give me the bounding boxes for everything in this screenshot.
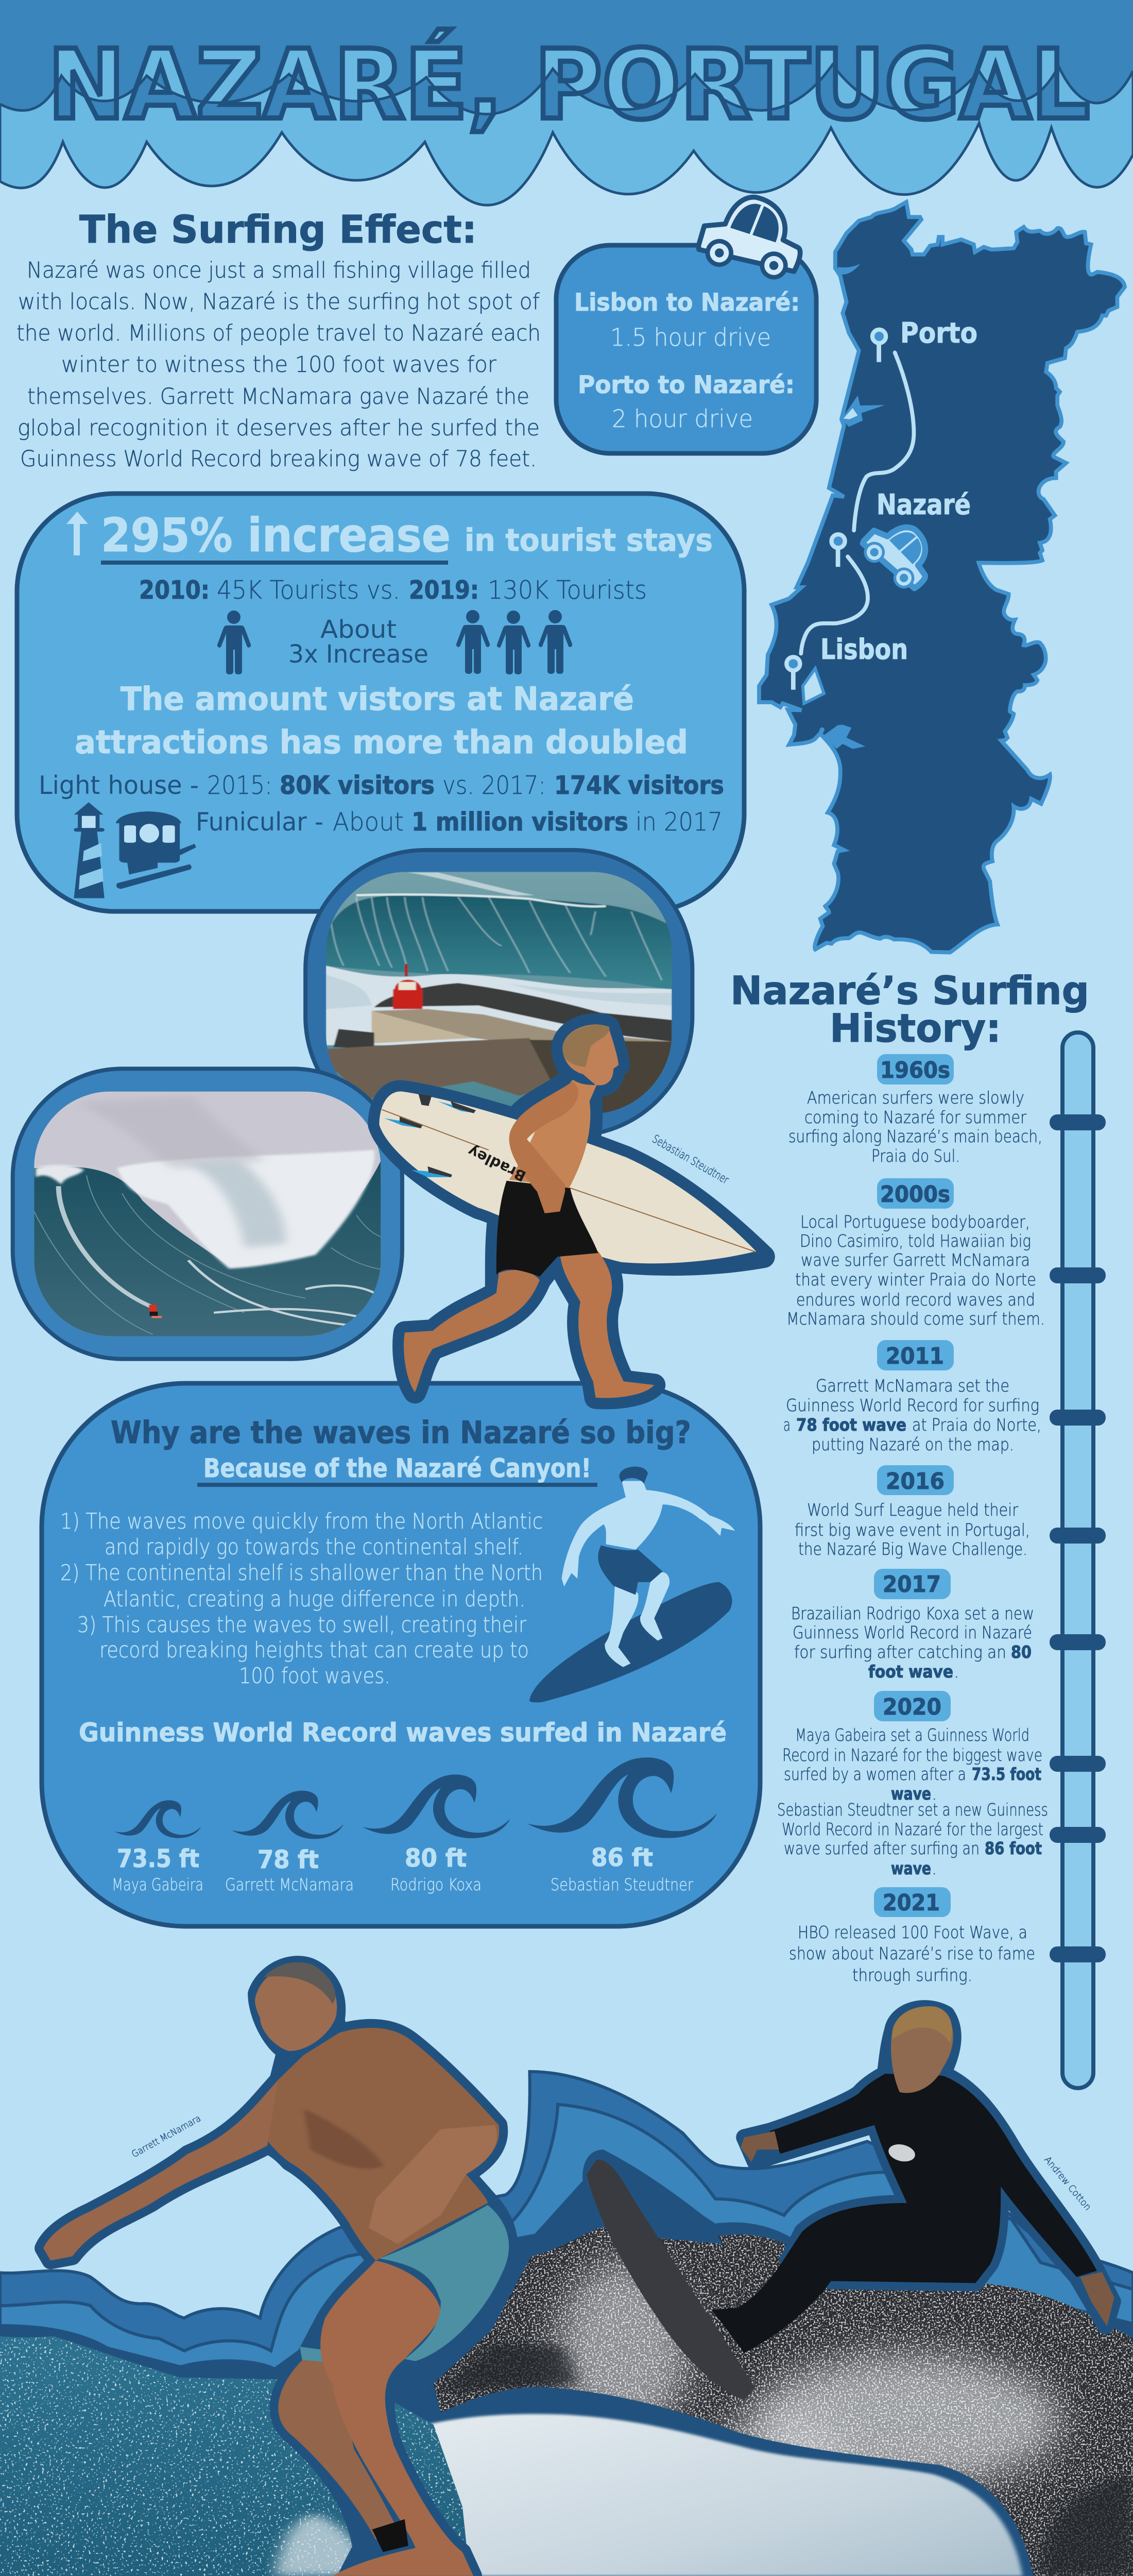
lighthouse stats: Light house - <box>39 771 199 800</box>
heading: why: Why are the waves in Nazaré so big? <box>111 1415 691 1451</box>
funicular stats: 1 million visitors <box>411 807 628 837</box>
timeline: 2021 <box>789 1887 1035 1985</box>
panel: drive times <box>556 245 816 453</box>
heading: surfing history <box>730 968 1089 1051</box>
intro text block: the world. Millions of people travel to Nazaré each <box>16 320 541 346</box>
timeline: 1960s <box>788 1054 1042 1166</box>
timeline: 2011: Guinness World Record for surfing <box>786 1395 1039 1415</box>
pin: Lisbon <box>786 657 800 690</box>
photo: spray <box>433 2215 1133 2576</box>
heading: surfing history: Nazaré’s Surfing <box>730 968 1089 1013</box>
timeline: 2000s: 2000s <box>880 1181 950 1208</box>
timeline: 2017: for surfing after catching an <box>794 1642 1006 1662</box>
surfboard <box>379 1092 756 1263</box>
heading: surfing history: History: <box>830 1005 1001 1051</box>
timeline: 2011: putting Nazaré on the map. <box>812 1434 1014 1454</box>
record: 78 ft wave: Garrett McNamara <box>225 1875 354 1894</box>
icon: one person <box>217 611 251 674</box>
tourists comparison: 130K Tourists <box>488 575 647 605</box>
heading: records: Guinness World Record waves surfed in Nazaré <box>79 1718 727 1748</box>
photo: blue water <box>0 2318 470 2576</box>
timeline: 2020: wave <box>891 1858 931 1878</box>
panel: why the waves are so big <box>42 1383 760 1926</box>
timeline: 2000s: wave surfer Garrett McNamara <box>801 1250 1030 1270</box>
record: 86 ft wave: Sebastian Steudtner <box>551 1875 694 1894</box>
header with waves and title: NAZARÉ, PORTUGAL <box>48 29 1090 141</box>
timeline: 2017: 80 <box>1011 1642 1032 1662</box>
icon: surfer <box>529 1467 735 1702</box>
timeline: 1960s: American surfers were slowly <box>807 1088 1024 1108</box>
lighthouse stats: 2015: <box>207 771 272 800</box>
map labels <box>820 317 977 666</box>
timeline: 2020: . <box>932 1784 937 1804</box>
icon: funicular <box>116 811 196 889</box>
lighthouse stats <box>39 771 724 800</box>
pin: Nazaré <box>831 534 845 567</box>
stat: 295% increase <box>101 509 713 565</box>
layered waves <box>0 2072 1133 2576</box>
intro text block: winter to witness the 100 foot waves for <box>61 352 496 378</box>
timeline: 1960s: Praia do Sul. <box>871 1146 960 1166</box>
numbered explanation: 1) The waves move quickly from the North Atlantic <box>60 1509 543 1534</box>
timeline: 2011: at Praia do Norte, <box>912 1415 1041 1435</box>
photo: Sebastian Steudtner running with surfboard <box>379 1024 764 1398</box>
record: 73.5 ft wave: Maya Gabeira <box>112 1875 203 1894</box>
timeline: 2020: wave <box>891 1784 931 1804</box>
about 3x increase <box>288 615 428 669</box>
intro text block: themselves. Garrett McNamara gave Nazaré the <box>27 384 529 410</box>
panel: drive times: Lisbon to Nazaré: <box>574 289 800 317</box>
panel: drive times: 2 hour drive <box>612 405 753 433</box>
timeline: 2011: a <box>783 1415 791 1435</box>
timeline: 2020: 2020 <box>883 1694 941 1720</box>
runner body <box>404 1024 654 1398</box>
timeline: 2017: Guinness World Record in Nazaré <box>793 1622 1032 1642</box>
timeline: 2000s: that every winter Praia do Norte <box>795 1269 1036 1290</box>
timeline: 2020: 73.5 foot <box>972 1764 1041 1784</box>
record: 86 ft wave: 86 ft <box>591 1843 653 1872</box>
bottom scene: waves and surfers <box>0 1962 1133 2576</box>
funicular stats: Funicular - <box>196 807 323 837</box>
map of Portugal <box>759 202 1125 953</box>
timeline: 2020: Sebastian Steudtner set a new Guinness <box>777 1800 1048 1820</box>
stat: 295% increase: in tourist stays <box>465 522 713 558</box>
surfboard brand text: Bradley <box>465 1142 528 1185</box>
timeline: 1960s: 1960s <box>880 1057 950 1083</box>
timeline: 2021: 2021 <box>883 1890 940 1916</box>
record: 78 ft wave <box>225 1791 354 1894</box>
record: 80 ft wave <box>362 1774 510 1894</box>
map labels: Nazaré <box>877 488 971 521</box>
lighthouse stats: 80K visitors <box>280 771 435 800</box>
timeline: 2017: . <box>954 1662 959 1682</box>
photo panel: giant wave and surfer <box>13 1069 402 1359</box>
map labels: Porto <box>900 317 977 349</box>
icon: up arrow <box>66 512 88 555</box>
intro text block: with locals. Now, Nazaré is the surfing hot spot of <box>18 289 540 315</box>
timeline: 2000s: endures world record waves and <box>796 1290 1035 1310</box>
route: Porto to Nazaré <box>854 352 914 530</box>
numbered explanation: record breaking heights that can create up to <box>99 1637 529 1663</box>
timeline: 2016 <box>795 1465 1030 1559</box>
timeline: 2020: World Record in Nazaré for the largest <box>782 1819 1043 1839</box>
caption: Garrett McNamara: Garrett McNamara <box>130 2113 203 2160</box>
subheading: canyon: Because of the Nazaré Canyon! <box>203 1453 591 1483</box>
route: Nazaré to Lisbon <box>801 556 868 653</box>
timeline: 2020 <box>777 1691 1048 1878</box>
timeline: 2020: Maya Gabeira set a Guinness World <box>795 1725 1029 1745</box>
foam band <box>426 2387 1033 2576</box>
halo outline <box>379 1024 764 1398</box>
record: 80 ft wave: Rodrigo Koxa <box>390 1875 482 1894</box>
timeline: 2016: 2016 <box>886 1468 945 1495</box>
timeline: 2021: through surfing. <box>852 1965 972 1985</box>
photo: Garrett McNamara <box>43 1962 509 2576</box>
timeline: 2017 <box>791 1569 1034 1682</box>
timeline: 2000s: Local Portuguese bodyboarder, <box>800 1212 1030 1232</box>
intro text block: Nazaré was once just a small fishing village filled <box>27 258 531 283</box>
timeline: 1960s: coming to Nazaré for summer <box>804 1107 1026 1127</box>
caption: Andrew Cotton: Andrew Cotton <box>1042 2155 1093 2213</box>
pin: Porto <box>872 330 886 362</box>
funicular stats: About <box>333 807 404 837</box>
record: 86 ft wave <box>527 1757 717 1894</box>
board <box>582 2149 755 2400</box>
about 3x increase: 3x Increase <box>288 640 428 669</box>
timeline: 2011 <box>783 1340 1041 1454</box>
timeline: 1960s: surfing along Nazaré’s main beach, <box>788 1126 1042 1146</box>
panel: drive times: 1.5 hour drive <box>610 324 771 352</box>
icon: car on map <box>856 509 945 597</box>
photo panel: crowd watching wave at lighthouse <box>305 850 692 1136</box>
intro text block: Guinness World Record breaking wave of 78 feet. <box>20 446 537 472</box>
photo: Andrew Cotton <box>712 2006 1114 2353</box>
estuaries <box>803 669 824 703</box>
timeline surfboard <box>1050 1032 1106 2088</box>
timeline: 2000s: McNamara should come surf them. <box>786 1309 1045 1329</box>
timeline: 2011: 2011 <box>886 1343 944 1369</box>
heading: attractions <box>75 680 688 761</box>
timeline: 2020: wave surfed after surfing an <box>784 1838 980 1858</box>
timeline: 2016: World Surf League held their <box>807 1500 1018 1520</box>
record: 80 ft wave: 80 ft <box>405 1844 467 1873</box>
timeline: 2020: . <box>932 1858 937 1878</box>
timeline: 2017: Brazailian Rodrigo Koxa set a new <box>791 1603 1034 1623</box>
tourists comparison: 2019: <box>409 575 479 605</box>
timeline: 2000s: Dino Casimiro, told Hawaiian big <box>800 1231 1031 1251</box>
timeline: 2021: show about Nazaré’s rise to fame <box>789 1943 1035 1963</box>
tourists comparison: 2010: <box>139 575 210 605</box>
icon: three people <box>456 610 572 674</box>
numbered explanation: 2) The continental shelf is shallower than the North <box>60 1560 543 1585</box>
timeline: 2020: Record in Nazaré for the biggest wave <box>782 1745 1042 1765</box>
timeline: 2020: surfed by a women after a <box>784 1764 966 1784</box>
timeline: 2020: 86 foot <box>985 1838 1042 1858</box>
timeline: 2011: 78 foot wave <box>796 1415 906 1435</box>
heading: The Surfing Effect: The Surfing Effect: <box>79 208 477 252</box>
title: NAZARÉ, PORTUGAL <box>48 29 1090 141</box>
tourists comparison <box>139 575 647 605</box>
numbered explanation: 3) This causes the waves to swell, creating their <box>77 1612 527 1637</box>
funicular stats <box>196 807 723 837</box>
record: 78 ft wave: 78 ft <box>258 1845 319 1874</box>
timeline: 2000s <box>786 1178 1045 1329</box>
intro text block <box>16 258 541 472</box>
stat: 295% increase: 295% increase <box>101 509 451 563</box>
about 3x increase: About <box>320 615 397 644</box>
numbered explanation: 100 foot waves. <box>239 1663 390 1688</box>
record: 73.5 ft wave <box>112 1800 203 1894</box>
timeline: 2016: first big wave event in Portugal, <box>795 1520 1030 1540</box>
icon: lighthouse <box>74 802 105 898</box>
heading: attractions: The amount vistors at Nazaré <box>121 680 634 718</box>
map labels: Lisbon <box>820 633 908 666</box>
tourists comparison: 45K Tourists vs. <box>217 575 400 605</box>
caption: Sebastian Steudtner: Sebastian Steudtner <box>650 1133 731 1187</box>
timeline: 2016: the Nazaré Big Wave Challenge. <box>798 1539 1027 1559</box>
numbered explanation <box>60 1509 543 1688</box>
lighthouse stats: vs. 2017: <box>442 771 546 800</box>
timeline: 2011: Garrett McNamara set the <box>816 1376 1009 1396</box>
record: 73.5 ft wave: 73.5 ft <box>117 1844 199 1873</box>
icon: car on drive box <box>695 187 811 284</box>
numbered explanation: and rapidly go towards the continental shelf. <box>105 1534 523 1560</box>
funicular stats: in 2017 <box>636 807 723 837</box>
timeline: 2021: HBO released 100 Foot Wave, a <box>798 1922 1027 1942</box>
panel: tourism statistics <box>17 494 744 911</box>
numbered explanation: Atlantic, creating a huge difference in depth. <box>104 1586 525 1612</box>
lighthouse stats: 174K visitors <box>554 771 724 800</box>
timeline: 2017: foot wave <box>868 1662 953 1682</box>
intro text block: global recognition it deserves after he surfed the <box>18 415 540 441</box>
panel: drive times: Porto to Nazaré: <box>578 371 795 399</box>
header with waves and title <box>0 0 1133 205</box>
heading: attractions: attractions has more than doubled <box>75 723 688 761</box>
timeline: 2017: 2017 <box>883 1571 941 1598</box>
